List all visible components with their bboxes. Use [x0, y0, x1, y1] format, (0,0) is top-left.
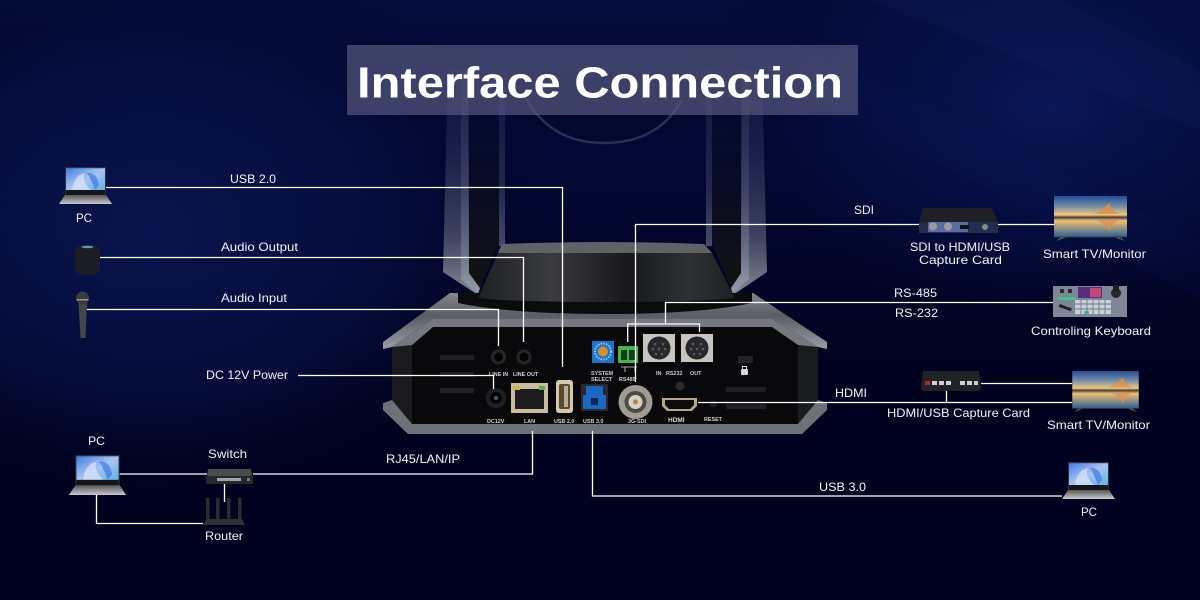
- icon: router: [203, 498, 245, 525]
- RS485 terminal: RS485: [619, 377, 635, 383]
- HDMI port: HDMI: [668, 417, 685, 424]
- connector: capture card to monitor: [981, 382, 1072, 384]
- connector: DC 12V: [298, 376, 494, 389]
- RS232 ports: RS232: [666, 371, 682, 377]
- DC power jack: [486, 388, 506, 425]
- pan base dome: [458, 242, 752, 314]
- RS485 terminal: [618, 346, 638, 383]
- icon: TV lower: [1072, 371, 1139, 412]
- title: Interface Connection: [357, 58, 843, 108]
- 3G-SDI connector: 3G-SDI: [628, 419, 646, 425]
- title: [347, 45, 858, 115]
- connector: LAN: [253, 431, 532, 474]
- label: USB 3.0: USB 3.0: [819, 480, 866, 494]
- label: PC: PC: [76, 211, 92, 225]
- USB 2.0 port: [554, 380, 574, 425]
- right arm: [706, 70, 767, 295]
- label: Smart TV/Monitor lower: Smart TV/Monitor: [1047, 418, 1150, 432]
- LAN port: LAN: [524, 419, 535, 425]
- label: SDI to HDMI/USB Capture Card: SDI to HDMI/USB: [910, 240, 1010, 254]
- label: Switch: Switch: [208, 447, 247, 461]
- icon: microphone: [76, 292, 89, 338]
- connector: HDMI: [698, 402, 1072, 404]
- connector: USB 2.0: [106, 188, 562, 367]
- icon: speaker: [75, 245, 100, 275]
- USB 3.0 port: [581, 384, 608, 425]
- reset button: [704, 400, 723, 423]
- line in and line out jacks: [489, 350, 539, 378]
- line in and line out jacks: LINE IN: [489, 372, 508, 378]
- icon: controlling keyboard: [1053, 285, 1127, 317]
- icon: PC left: [69, 455, 126, 495]
- label: HDMI: HDMI: [835, 386, 867, 400]
- camera head behind title: [505, 70, 706, 143]
- label: PC lower right: PC: [1081, 505, 1097, 519]
- label: HDMI/USB Capture Card: HDMI/USB Capture Card: [887, 406, 1030, 420]
- camera illustration: [383, 70, 827, 434]
- label: Smart TV/Monitor top: Smart TV/Monitor: [1043, 247, 1146, 261]
- vents: [440, 355, 766, 409]
- lock slot: [738, 356, 753, 375]
- system select dial: SELECT: [591, 377, 613, 383]
- label: DC 12V Power: DC 12V Power: [206, 368, 288, 382]
- connector: capture card to TV: [998, 224, 1054, 226]
- label: SDI to HDMI/USB Capture Card: Capture Card: [919, 253, 1002, 267]
- system select dial: SYSTEM: [591, 371, 614, 377]
- connector: USB 3.0: [592, 431, 1062, 496]
- icon: HDMI capture card: [921, 371, 981, 391]
- system select dial: [591, 341, 614, 383]
- label: Audio Output: Audio Output: [221, 240, 299, 254]
- body top plate: [383, 293, 827, 349]
- USB 3.0 port: USB 3.0: [583, 419, 603, 425]
- left arm: [443, 70, 505, 295]
- LAN port: [511, 383, 548, 425]
- connector: audio output: [100, 258, 524, 342]
- DC power jack: DC12V: [487, 419, 505, 425]
- reset button: RESET: [704, 417, 723, 423]
- label: RJ45/LAN/IP: RJ45/LAN/IP: [386, 452, 460, 466]
- label: Audio Input: Audio Input: [221, 291, 288, 305]
- label: Router: Router: [205, 529, 243, 543]
- label: USB 2.0: USB 2.0: [230, 172, 276, 186]
- icon: switch: [206, 469, 253, 484]
- HDMI port: [662, 382, 697, 424]
- label: RS-485: RS-485: [894, 286, 937, 300]
- label: SDI: SDI: [854, 203, 874, 217]
- icon: PC lower right: [1062, 462, 1115, 499]
- connector: RS-485 and RS-232: [628, 302, 1055, 342]
- label: PC left: PC: [88, 434, 105, 448]
- USB 2.0 port: USB 2.0: [554, 419, 574, 425]
- connector: capture card branch: [946, 390, 948, 402]
- icon: SDI capture card: [919, 208, 998, 233]
- connector: audio input: [87, 310, 498, 346]
- label: RS-232: RS-232: [895, 306, 938, 320]
- connector: PC to router: [96, 495, 203, 524]
- icon: TV top: [1054, 196, 1127, 241]
- RS232 ports: IN: [656, 371, 661, 377]
- RS232 ports: OUT: [690, 371, 702, 377]
- connector: PC to switch: [119, 473, 207, 475]
- body shell: [383, 319, 827, 434]
- 3G-SDI connector: [618, 385, 652, 425]
- connector: switch to router: [224, 484, 226, 502]
- line in and line out jacks: LINE OUT: [513, 372, 539, 378]
- label: Controling Keyboard: Controling Keyboard: [1031, 324, 1151, 338]
- RS232 ports: [643, 334, 713, 377]
- label: SDI to HDMI/USB Capture Card: [910, 240, 1010, 267]
- icon: PC top left: [59, 167, 112, 204]
- connector: SDI: [636, 224, 919, 382]
